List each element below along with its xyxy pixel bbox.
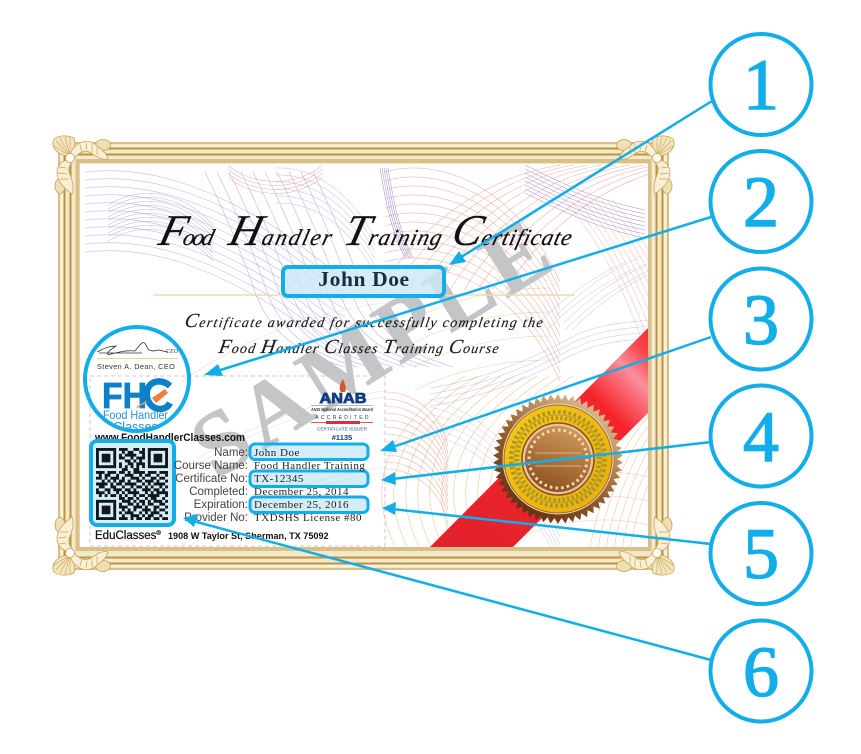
QR code xyxy=(96,449,168,519)
corner ornament: top right xyxy=(616,136,674,194)
number badge 5 xyxy=(710,503,812,604)
title: Food xyxy=(154,206,222,255)
number badge 1: 1 xyxy=(743,45,779,125)
field values: TX-12345 xyxy=(254,473,304,485)
ANAB accreditation logo: ANSI National Accreditation Board xyxy=(310,407,374,413)
field labels: Course Name: xyxy=(174,460,248,472)
field values xyxy=(254,447,365,524)
number badge 3: 3 xyxy=(743,280,779,360)
ANAB accreditation logo: ACCREDITED xyxy=(315,415,371,421)
signature: Steven A. Dean, CEO xyxy=(97,362,175,371)
field labels: Expiration: xyxy=(194,499,248,511)
website: www.FoodHandlerClasses.com xyxy=(94,432,245,444)
field labels: Completed: xyxy=(189,486,248,498)
highlight: recipient name xyxy=(283,267,444,296)
arrow 5 xyxy=(382,502,711,544)
title: Certificate xyxy=(448,206,580,255)
title xyxy=(154,206,580,255)
field values: December 25, 2016 xyxy=(254,499,349,511)
field labels: Certificate No: xyxy=(175,473,248,485)
subtitle: Certificate awarded for successfully completing the xyxy=(183,310,545,332)
number badge 4: 4 xyxy=(743,397,779,477)
issuer address: ® xyxy=(156,530,161,537)
field values: Food Handler Training xyxy=(254,460,365,472)
FHC logo: Food Handler xyxy=(103,408,168,422)
number badge 1 xyxy=(710,34,812,135)
issuer address: 1908 W Taylor St, Sherman, TX 75092 xyxy=(168,531,329,541)
dashed info panel xyxy=(90,376,385,546)
corner ornament: top left xyxy=(53,136,110,194)
subtitle xyxy=(183,310,545,358)
signature xyxy=(97,343,179,371)
FHC logo: Classes xyxy=(113,420,158,434)
number badge 3 xyxy=(710,268,812,370)
arrow 3 xyxy=(380,337,711,452)
number badge 5: 5 xyxy=(743,514,779,594)
field values: December 25, 2014 xyxy=(254,486,349,498)
subtitle: Food Handler Classes Training Course xyxy=(216,336,501,358)
red ribbon xyxy=(430,328,648,547)
issuer address xyxy=(95,530,329,542)
signature: CEO xyxy=(166,349,179,355)
highlight: student name field xyxy=(250,444,368,460)
number badge 6: 6 xyxy=(743,632,779,712)
arrow 2 xyxy=(204,217,711,376)
corner ornament: bottom left xyxy=(53,517,110,575)
gold seal xyxy=(493,394,623,524)
field values: John Doe xyxy=(254,447,300,459)
arrow 6 xyxy=(183,514,711,660)
SAMPLE watermark: SAMPLE xyxy=(174,200,568,497)
number badge 6 xyxy=(710,620,812,722)
circle highlight: FHC logo and signature xyxy=(85,327,189,431)
QR code highlight box xyxy=(91,441,174,525)
ANAB accreditation logo xyxy=(310,379,374,442)
highlight: expiration field xyxy=(250,497,368,512)
number badge 2: 2 xyxy=(743,162,779,242)
arrow 4 xyxy=(381,442,711,485)
number badge 4 xyxy=(710,386,812,486)
FHC logo: FH xyxy=(102,375,147,416)
issuer address: EduClasses xyxy=(95,530,156,542)
number badge 2 xyxy=(710,151,812,252)
field values: TXDSHS License #80 xyxy=(254,512,362,524)
ANAB accreditation logo: CERTIFICATE ISSUER xyxy=(317,426,368,432)
certificate xyxy=(53,136,688,575)
divider under name xyxy=(153,294,575,296)
certificate paper xyxy=(80,164,648,547)
ANAB accreditation logo: #1135 xyxy=(332,433,352,442)
title: Handler xyxy=(224,206,341,255)
field labels: Name: xyxy=(214,447,248,459)
arrow 1 xyxy=(449,101,712,265)
highlight: certificate number field xyxy=(250,471,368,486)
highlight: recipient name: John Doe xyxy=(318,267,410,291)
field labels: Provider No: xyxy=(184,512,248,524)
frame: gold striped border xyxy=(58,142,669,570)
FHC logo xyxy=(104,378,173,429)
field labels xyxy=(174,447,248,524)
title: Training xyxy=(340,206,450,255)
corner ornament: bottom right xyxy=(616,517,674,575)
guilloche background pattern xyxy=(85,165,688,565)
ANAB accreditation logo: ANAB xyxy=(320,391,366,407)
